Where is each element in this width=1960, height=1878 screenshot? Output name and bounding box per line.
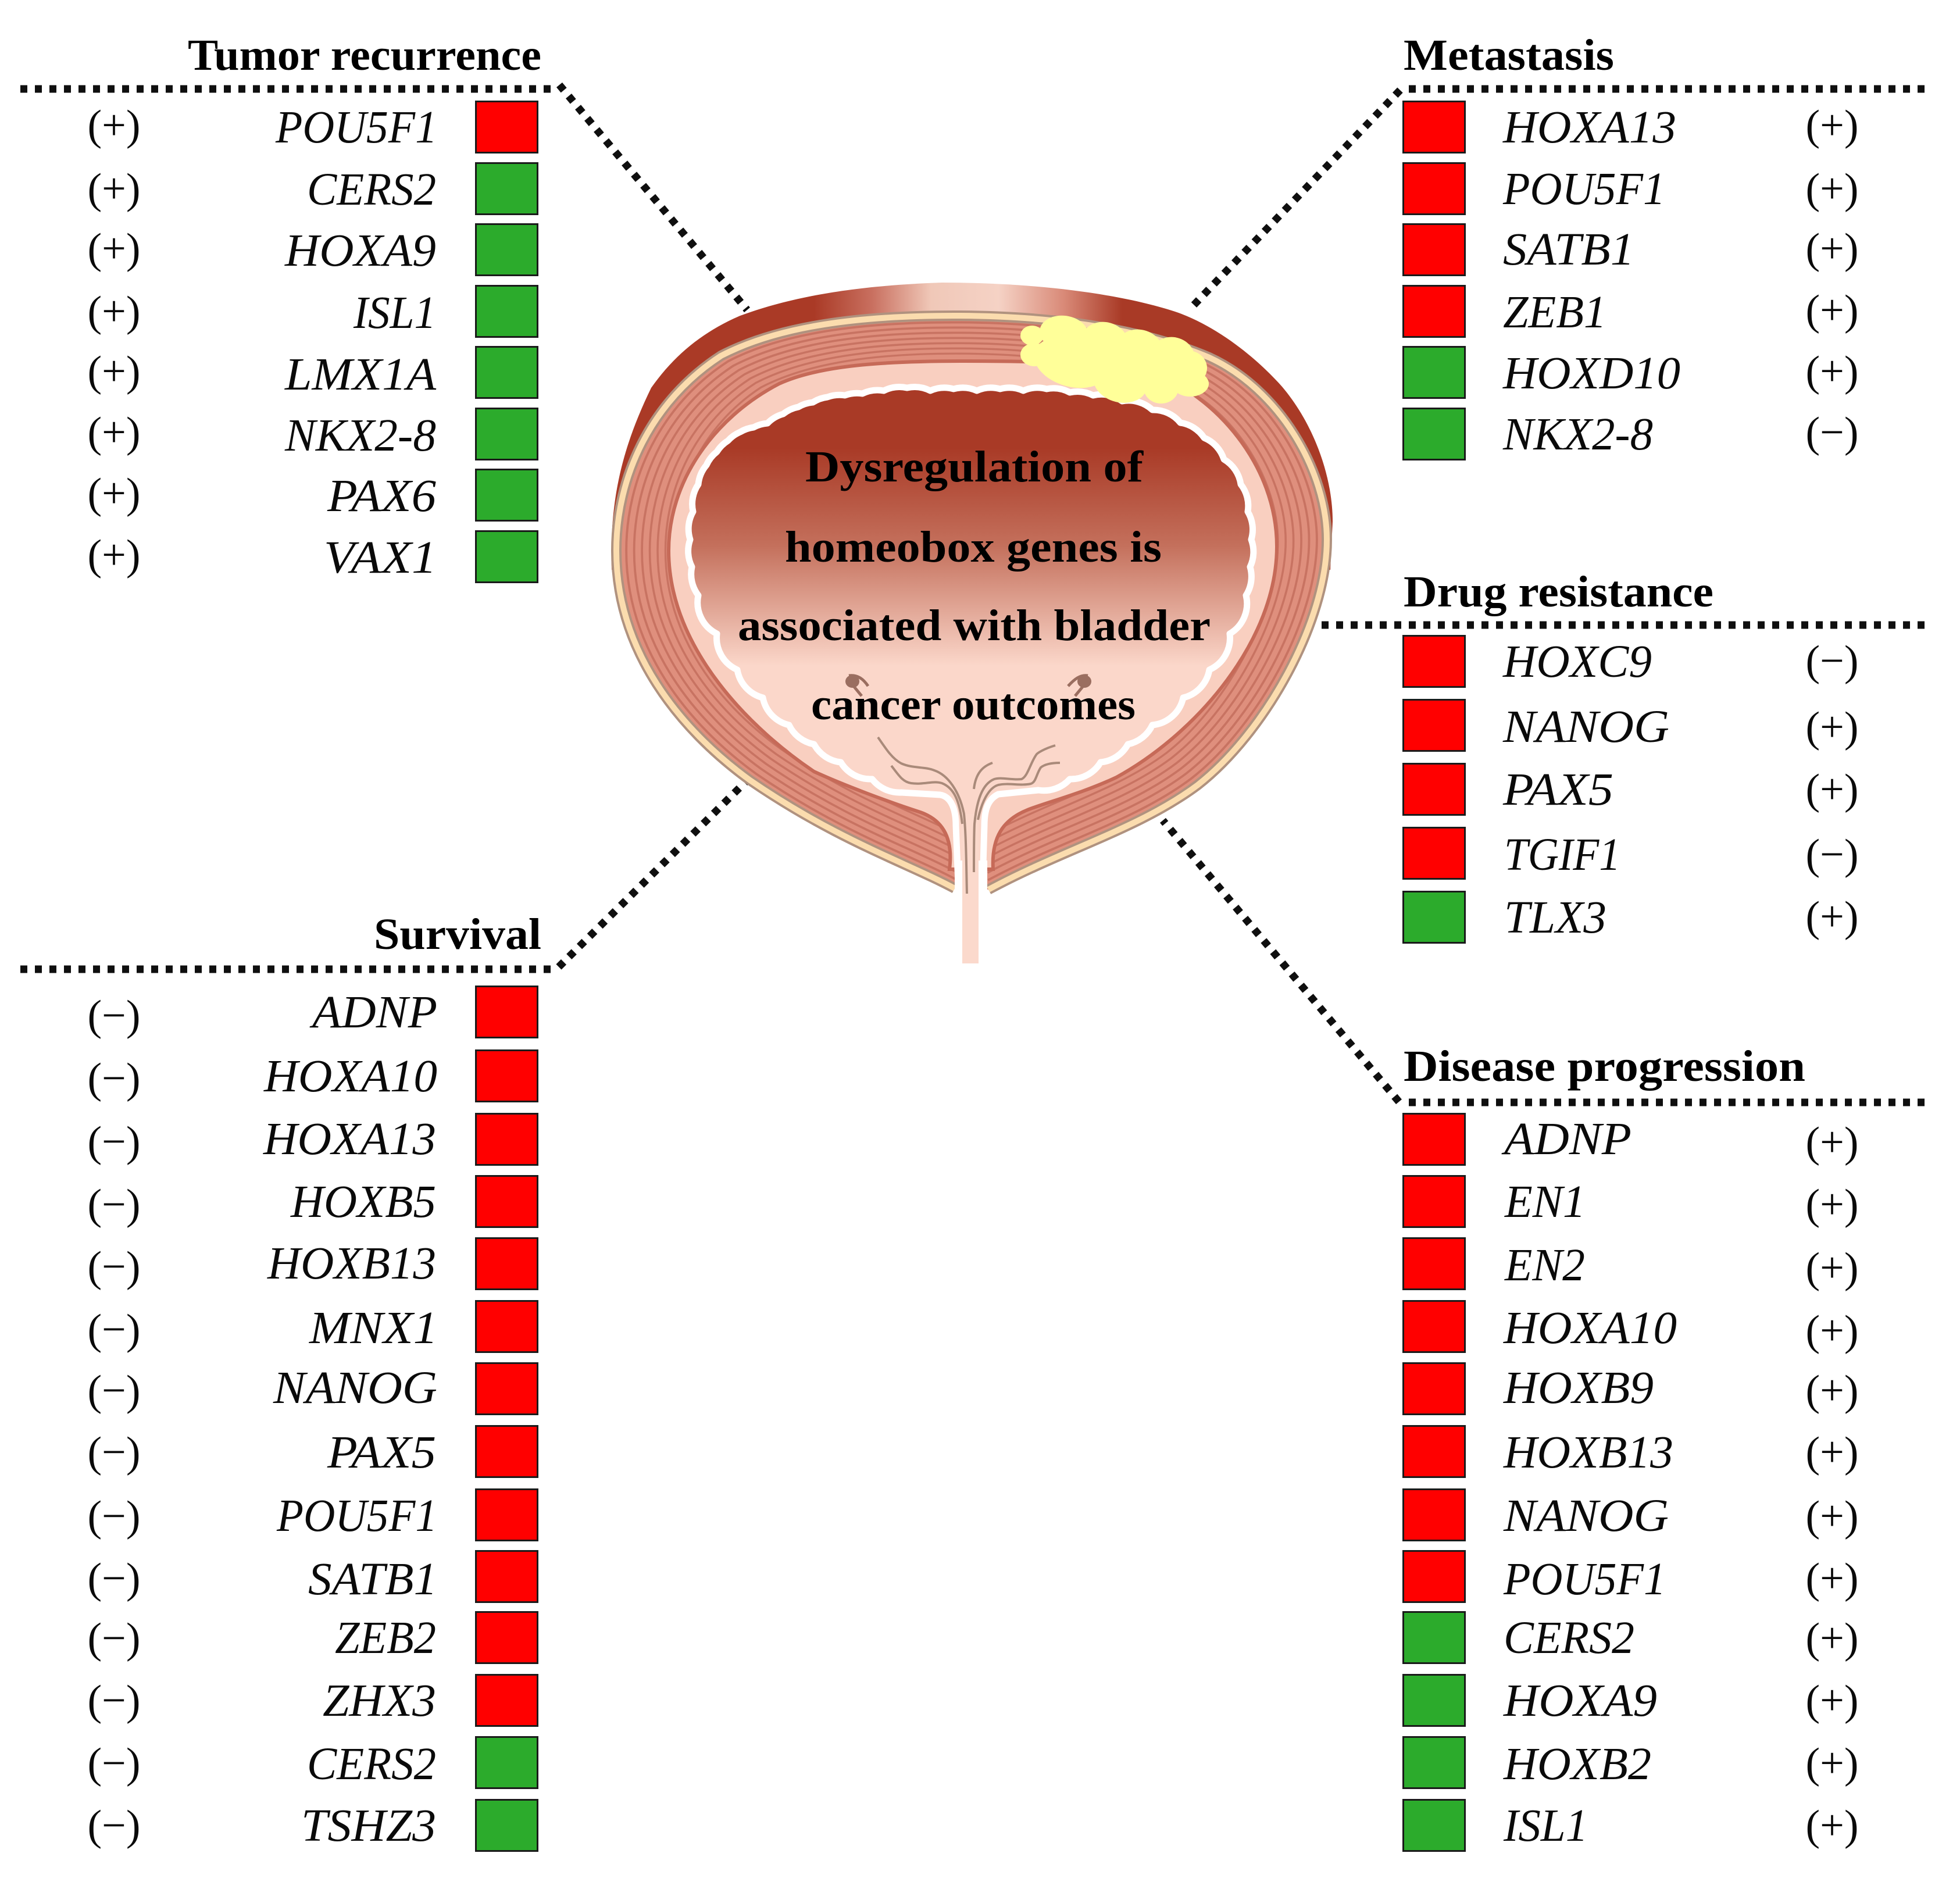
row: HOXA13: (+) [1805,102,1859,149]
row: NANOG: (−) [87,1367,141,1415]
row: TGIF1 [1404,828,1859,880]
row: HOXB9: HOXB9 [1503,1363,1654,1413]
row: HOXD10: HOXD10 [1502,348,1680,399]
row: NKX2-8 [87,408,537,461]
row: LMX1A: LMX1A [284,349,437,400]
row: CERS2 [1404,1612,1859,1663]
row: HOXB9: (+) [1805,1367,1859,1415]
row: TLX3: (+) [1805,893,1859,941]
row: POU5F1: POU5F1 [276,1491,437,1541]
row: CERS2: CERS2 [307,165,436,215]
connector: survival dotted leader [20,780,747,969]
row: ZEB2: (−) [87,1615,141,1662]
row: PAX6: PAX6 [327,471,437,522]
row: ADNP: (+) [1805,1119,1859,1166]
row: ISL1: (+) [1805,1802,1859,1850]
row: HOXA10 [1404,1301,1859,1355]
row: EN1 [1404,1176,1859,1229]
row: EN2 [1404,1238,1859,1292]
row: SATB1: (−) [87,1555,141,1602]
row: CERS2: CERS2 [307,1739,436,1790]
row: HOXB13: (−) [87,1243,141,1291]
row: HOXA13: HOXA13 [1502,102,1676,153]
row: HOXD10: (+) [1805,348,1859,395]
row: POU5F1: (+) [1805,1555,1859,1602]
row: HOXA13: HOXA13 [263,1114,436,1165]
row: NKX2-8: NKX2-8 [284,410,436,461]
row: ISL1: ISL1 [1503,1801,1588,1851]
row: CERS2: (−) [87,1740,141,1787]
row: HOXB5: HOXB5 [290,1177,436,1227]
row: HOXA9: HOXA9 [284,226,436,276]
row: NANOG [1404,1490,1859,1541]
urethra [955,814,987,965]
bladder rim back wall [612,283,1333,570]
row: HOXB13 [1404,1426,1859,1478]
bladder lumen with wavy white mucosa [688,387,1254,884]
row: POU5F1 [1404,1551,1859,1605]
row: PAX5 [87,1426,537,1478]
heading: drug resistance: Drug resistance [1404,567,1713,616]
row: ADNP: ADNP [1501,1114,1631,1165]
panel: survival [87,910,541,1851]
row: SATB1 [1404,224,1859,276]
row: PAX5: (−) [87,1429,141,1476]
row: ISL1 [87,286,537,338]
row: HOXA13 [1404,101,1859,153]
row: NANOG: (+) [1805,704,1859,751]
row: TSHZ3 [87,1800,537,1851]
row: POU5F1 [87,101,537,153]
row: HOXB2: HOXB2 [1503,1739,1651,1790]
panel: tumor recurrence [87,31,541,583]
row: HOXC9: (−) [1805,637,1859,685]
row: PAX6: (+) [87,470,141,517]
row: HOXA9: (+) [87,225,141,273]
central statement: cancer outcomes [811,680,1136,729]
connector: disease progression dotted leader [1163,820,1925,1102]
row: NANOG: NANOG [1503,1491,1669,1541]
row: HOXB2 [1404,1737,1859,1790]
row: ISL1 [1404,1800,1859,1851]
panel: metastasis [1404,31,1859,460]
row: VAX1: (+) [87,531,141,579]
row: PAX5: PAX5 [1502,765,1613,815]
bladder illustration [612,283,1333,965]
row: MNX1: MNX1 [309,1303,438,1354]
row: ADNP [1404,1114,1859,1166]
row: HOXA10: HOXA10 [263,1051,437,1102]
row: VAX1 [87,531,537,583]
row: ZEB1: ZEB1 [1503,287,1606,338]
row: EN2: EN2 [1504,1240,1585,1291]
row: LMX1A [87,347,537,400]
central statement: homeobox genes is [785,523,1162,572]
row: NKX2-8: NKX2-8 [1502,409,1653,460]
row: TLX3 [1404,892,1859,943]
row: NANOG: (+) [1805,1493,1859,1540]
row: TGIF1: TGIF1 [1504,830,1620,880]
ureteral orifice left [845,675,868,696]
row: NANOG [87,1363,537,1415]
row: HOXB5: (−) [87,1181,141,1229]
central statement [738,442,1211,729]
row: ADNP [87,986,537,1040]
row: EN1: EN1 [1504,1177,1586,1227]
row: ZEB1 [1404,286,1859,338]
row: EN1: (+) [1805,1181,1859,1229]
tumor blob [1020,312,1209,408]
row: CERS2 [87,163,537,215]
row: TSHZ3: TSHZ3 [301,1801,436,1851]
row: HOXB13 [87,1238,537,1291]
row: TGIF1: (−) [1805,831,1859,879]
row: NANOG: NANOG [1502,702,1669,752]
row: ISL1: ISL1 [353,288,436,338]
central statement: associated with bladder [738,601,1211,650]
row: POU5F1: (+) [1805,165,1859,213]
row: HOXA9 [1404,1675,1859,1726]
row: HOXA9: (+) [1805,1677,1859,1725]
row: HOXA10 [87,1050,537,1102]
row: NANOG [1404,700,1859,752]
row: CERS2: (+) [1805,1615,1859,1662]
row: ADNP: ADNP [309,987,437,1038]
row: HOXB13: HOXB13 [1503,1427,1673,1478]
row: POU5F1: POU5F1 [1503,1554,1666,1605]
heading: survival: Survival [374,910,541,959]
row: HOXA13: (−) [87,1118,141,1166]
row: CERS2: CERS2 [1504,1613,1634,1663]
row: TLX3: TLX3 [1504,892,1606,943]
connector: metastasis dotted leader [1191,89,1925,308]
row: HOXC9: HOXC9 [1502,637,1652,687]
row: NKX2-8: (+) [87,409,141,456]
row: HOXA13 [87,1114,537,1166]
row: TSHZ3: (−) [87,1802,141,1850]
row: ZEB2: ZEB2 [335,1613,436,1663]
row: HOXD10 [1404,347,1859,399]
heading: metastasis: Metastasis [1404,31,1614,80]
row: ZHX3: (−) [87,1677,141,1725]
row: PAX5 [1404,764,1859,815]
row: HOXB13: HOXB13 [267,1238,436,1289]
row: POU5F1 [87,1490,537,1541]
bladder outer tan band [616,316,1327,890]
row: NKX2-8 [1404,408,1859,460]
row: HOXB13: (+) [1805,1429,1859,1476]
row: CERS2 [87,1737,537,1790]
row: HOXA10: (+) [1805,1307,1859,1355]
row: HOXA9: HOXA9 [1503,1676,1657,1726]
connector: drug resistance dotted leader [1319,621,1925,629]
heading: tumor recurrence: Tumor recurrence [188,31,541,80]
row: ADNP: (−) [87,992,141,1040]
row: MNX1: (−) [87,1306,141,1354]
row: LMX1A: (+) [87,348,141,395]
row: HOXC9 [1404,636,1859,687]
central statement: Dysregulation of [805,442,1144,491]
row: EN2: (+) [1805,1244,1859,1292]
row: ZEB1: (+) [1805,287,1859,334]
row: HOXB5 [87,1176,537,1229]
connector: tumor recurrence dotted leader [20,85,747,310]
row: POU5F1: POU5F1 [275,102,437,153]
bladder lamina lining [669,361,1277,869]
row: HOXB2: (+) [1805,1740,1859,1787]
row: ZHX3 [87,1675,537,1726]
heading: disease progression: Disease progression [1404,1042,1805,1091]
row: POU5F1: POU5F1 [1502,164,1665,215]
row: CERS2: (+) [87,165,141,213]
panel: disease progression [1404,1042,1859,1851]
row: HOXA9 [87,224,537,276]
bladder muscle layer [616,316,1327,890]
row: ZHX3: ZHX3 [323,1676,436,1726]
row: SATB1 [87,1551,537,1605]
row: ISL1: (+) [87,288,141,335]
row: MNX1 [87,1301,537,1354]
row: PAX5: (+) [1805,766,1859,813]
row: NANOG: NANOG [273,1363,437,1413]
row: NKX2-8: (−) [1805,409,1859,456]
row: PAX5: PAX5 [327,1427,436,1478]
ureteral orifice right [1068,675,1091,696]
row: SATB1: SATB1 [308,1554,437,1605]
row: VAX1: VAX1 [324,533,437,583]
row: POU5F1: (−) [87,1493,141,1540]
row: ZEB2 [87,1612,537,1663]
row: PAX6 [87,470,537,522]
row: SATB1: (+) [1805,225,1859,273]
row: HOXA10: (−) [87,1055,141,1102]
panel: drug resistance [1404,567,1859,943]
row: POU5F1 [1404,163,1859,215]
trigone fine lines [878,737,1060,894]
row: HOXA10: HOXA10 [1503,1303,1677,1354]
row: SATB1: SATB1 [1503,224,1634,275]
row: POU5F1: (+) [87,102,141,149]
row: HOXB9 [1404,1363,1859,1415]
